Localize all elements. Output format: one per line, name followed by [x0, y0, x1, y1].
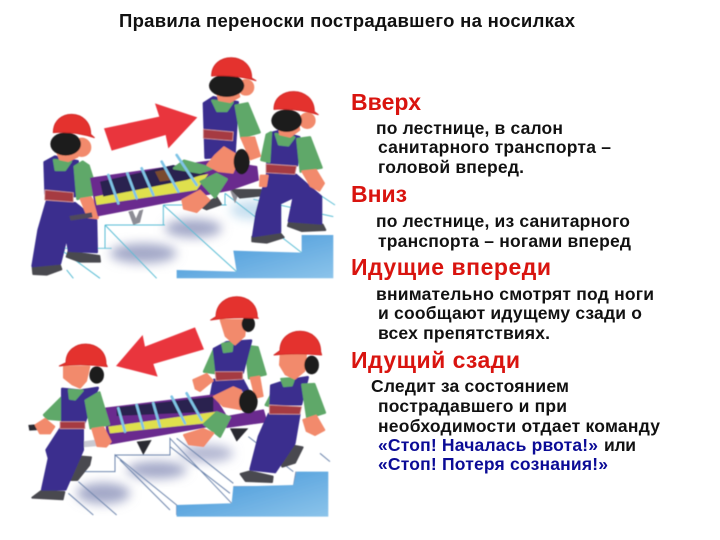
- text block: down: [351, 181, 631, 251]
- text block: down: Вниз: [351, 181, 407, 207]
- text block: up: [351, 89, 611, 177]
- illustration: carrying the stretcher downstairs: [28, 297, 330, 517]
- text block: walking behind: или: [604, 435, 636, 455]
- worker: front left: [28, 344, 111, 499]
- text block: walking in front: внимательно смотрят под ноги: [376, 284, 654, 304]
- text block: walking behind: необходимости отдает команду: [378, 416, 660, 436]
- text block: up: головой вперед.: [378, 157, 524, 177]
- text block: down: транспорта – ногами вперед: [378, 231, 631, 251]
- text block: up: санитарного транспорта –: [378, 137, 611, 157]
- text block: walking behind: пострадавшего и при: [378, 396, 567, 416]
- text block: walking behind: «Стоп! Началась рвота!»: [378, 435, 598, 455]
- stairs: [68, 437, 330, 517]
- text block: up: Вверх: [351, 89, 421, 115]
- worker: rear right: [241, 331, 325, 482]
- stretcher with patient: [69, 147, 263, 225]
- stretcher with patient: [73, 387, 267, 455]
- title: Правила переноски пострадавшего на носилках: [119, 10, 576, 31]
- text block: up: по лестнице, в салон: [376, 118, 563, 138]
- worker: front far: [203, 58, 260, 159]
- worker: front near: [252, 92, 325, 243]
- worker: rear: [33, 114, 100, 275]
- arrow: [116, 327, 204, 377]
- text block: walking behind: «Стоп! Потеря сознания!»: [378, 454, 608, 474]
- text block: walking behind: Следит за состоянием: [371, 376, 569, 396]
- text block: walking in front: [351, 254, 654, 343]
- text block: walking behind: Идущий сзади: [351, 347, 520, 373]
- text block: walking in front: и сообщают идущему сзади о: [378, 303, 642, 323]
- illustration: carrying the stretcher upstairs: [33, 58, 335, 278]
- text block: walking in front: всех препятствиях.: [378, 323, 550, 343]
- arrow: [104, 103, 197, 151]
- worker: middle: [193, 297, 266, 398]
- text block: walking behind: [351, 347, 660, 474]
- text block: walking in front: Идущие впереди: [351, 254, 551, 280]
- stairs: [57, 193, 335, 278]
- text block: down: по лестнице, из санитарного: [376, 211, 630, 231]
